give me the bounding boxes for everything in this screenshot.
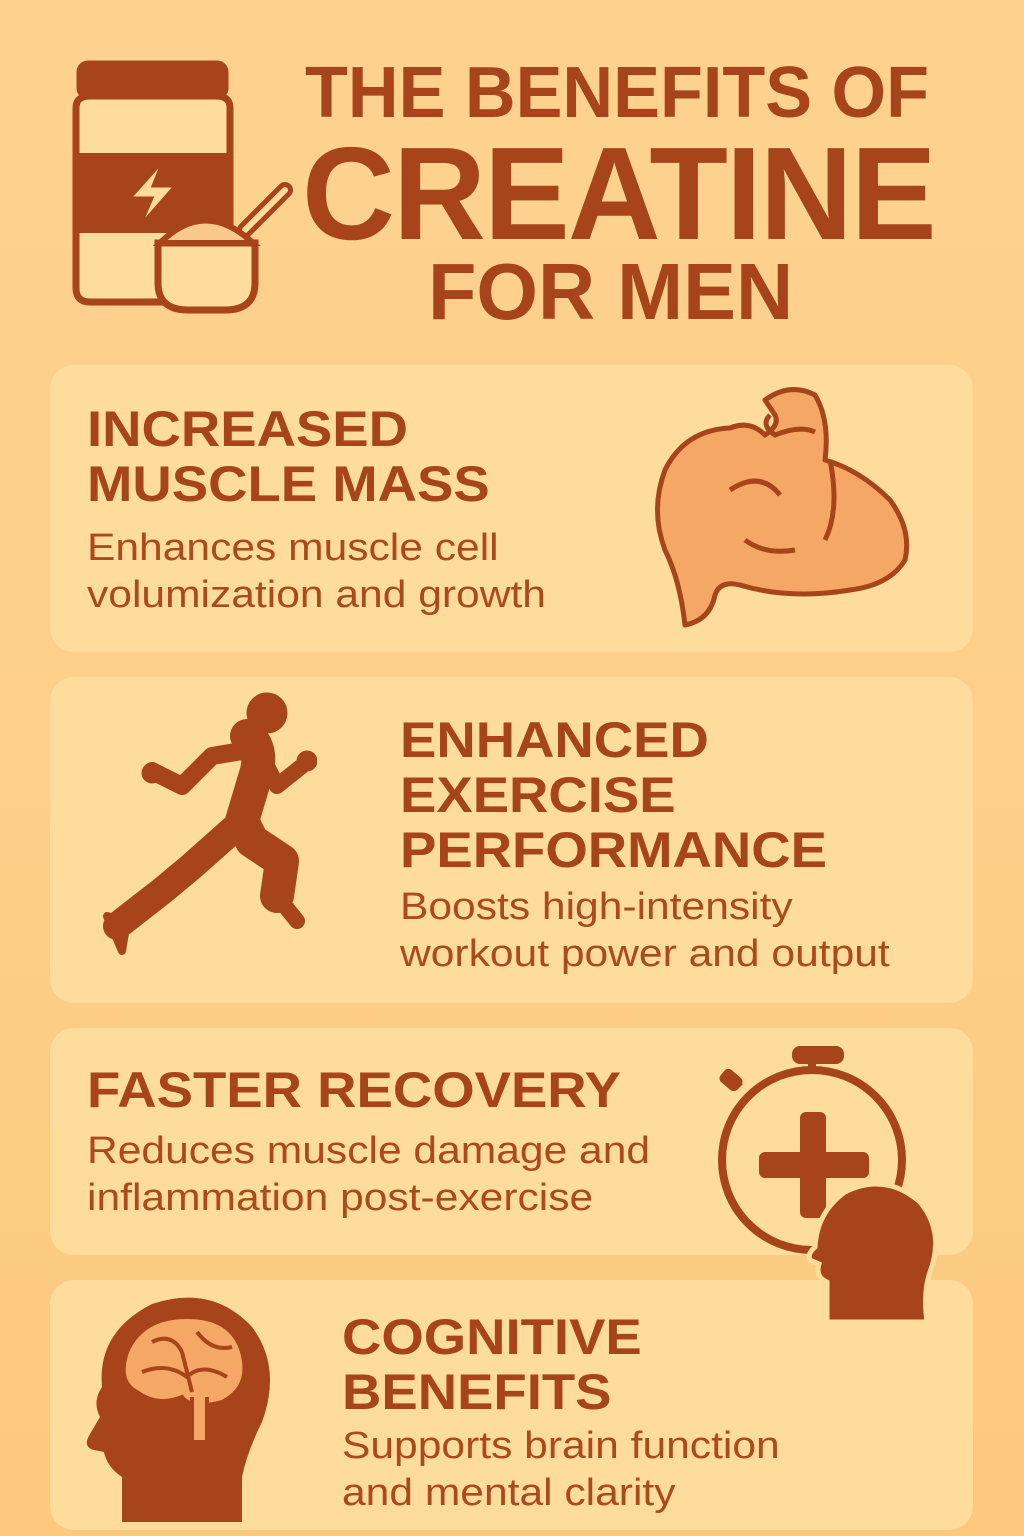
- heading: faster recovery: FASTER RECOVERY: [87, 1062, 621, 1118]
- icon: stopwatch with plus and head: [718, 1046, 937, 1320]
- text: exercise description: [400, 886, 890, 975]
- heading: enhanced exercise performance: ENHANCED: [400, 712, 709, 768]
- text: exercise description: Boosts high-intensity: [400, 886, 793, 928]
- text: cognitive description: Supports brain function: [342, 1425, 780, 1467]
- text: muscle description: Enhances muscle cell: [87, 527, 499, 569]
- heading: cognitive benefits: BENEFITS: [342, 1364, 612, 1420]
- panel: faster recovery: [50, 1028, 973, 1255]
- panel: cognitive benefits: [50, 1280, 973, 1530]
- text: recovery description: inflammation post-exercise: [87, 1177, 593, 1219]
- heading: enhanced exercise performance: EXERCISE: [400, 767, 676, 823]
- text: muscle description: [87, 527, 546, 616]
- text: recovery description: Reduces muscle damage and: [87, 1130, 650, 1172]
- icon: runner: [103, 692, 317, 955]
- text: recovery description: [87, 1130, 650, 1219]
- title: CREATINE: [302, 120, 935, 267]
- heading: increased muscle mass: MUSCLE MASS: [87, 456, 490, 512]
- text: exercise description: workout power and output: [400, 933, 890, 975]
- title: [302, 53, 935, 336]
- icon: creatine jar and scoop: [72, 60, 293, 314]
- title: THE BENEFITS OF: [305, 53, 929, 133]
- heading: increased muscle mass: INCREASED: [87, 401, 408, 457]
- heading: enhanced exercise performance: [400, 712, 827, 878]
- panel: muscle mass: [50, 365, 973, 652]
- heading: cognitive benefits: COGNITIVE: [342, 1309, 642, 1365]
- text: cognitive description: [342, 1425, 780, 1514]
- heading: enhanced exercise performance: PERFORMANCE: [400, 822, 827, 878]
- text: muscle description: volumization and growth: [87, 574, 546, 616]
- panel: exercise performance: [50, 677, 973, 1003]
- icon: head with brain: [86, 1298, 270, 1522]
- heading: cognitive benefits: [342, 1309, 642, 1420]
- text: cognitive description: and mental clarity: [342, 1472, 676, 1514]
- title: FOR MEN: [428, 247, 793, 336]
- heading: increased muscle mass: [87, 401, 490, 512]
- icon: flexed bicep: [655, 387, 910, 628]
